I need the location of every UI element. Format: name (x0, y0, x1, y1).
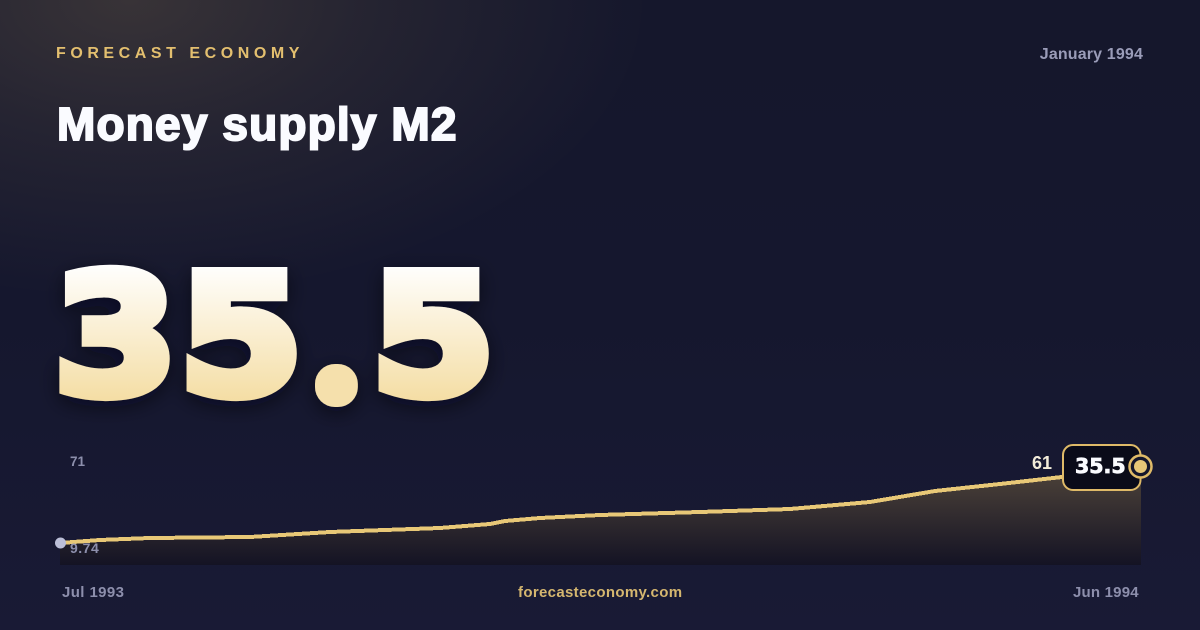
big value 35.5: . (333, 372, 339, 391)
website footer: forecasteconomy.com (518, 584, 682, 601)
x axis start label: Jul 1993 (62, 584, 124, 601)
current value callout (1063, 445, 1152, 490)
current value callout: 35.5 (1075, 454, 1126, 478)
axis max label: 71 (70, 454, 85, 469)
big value 35.5: 3 (54, 241, 178, 432)
big value 35.5: 5 (371, 241, 495, 432)
date label: January 1994 (1040, 46, 1143, 63)
x axis end label: Jun 1994 (1073, 584, 1139, 601)
big value 35.5 (54, 241, 495, 432)
end point marker (1130, 456, 1152, 478)
chart line (60, 477, 1062, 543)
start point marker (55, 538, 66, 548)
big value 35.5: 5 (179, 241, 303, 432)
title: Money supply M2 (57, 98, 458, 150)
axis min label: 9.74 (70, 540, 99, 556)
peak value label: 61 (1032, 453, 1052, 473)
eyebrow: brand name: FORECAST ECONOMY (56, 45, 304, 62)
area chart fill (60, 470, 1141, 565)
